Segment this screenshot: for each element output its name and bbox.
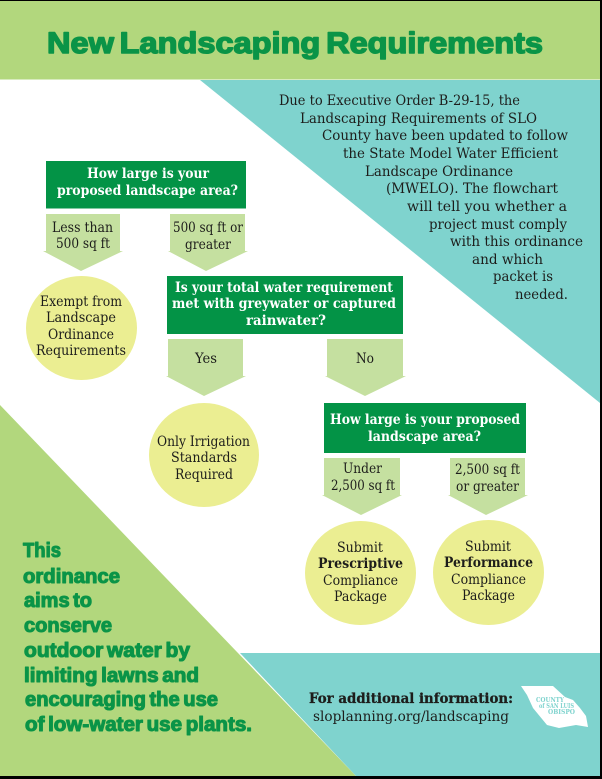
arrow: under 2,500 sq ft bbox=[322, 458, 402, 515]
circle: exempt: Exempt from bbox=[40, 294, 122, 310]
arrow: less than 500 sq ft: Less than bbox=[52, 220, 113, 236]
footer text bbox=[309, 691, 513, 725]
intro text: and which bbox=[472, 252, 543, 268]
intro text: County have been updated to follow bbox=[322, 128, 568, 144]
conservation text: encouraging the use bbox=[25, 689, 218, 711]
intro text: packet is bbox=[493, 269, 553, 285]
intro text: Landscape Ordinance bbox=[365, 164, 513, 180]
circle: performance package: Performance bbox=[444, 555, 533, 571]
question box: water requirement: Is your total water requirement bbox=[175, 280, 393, 296]
arrow: 500 sq ft or greater: 500 sq ft or bbox=[173, 220, 243, 236]
conservation text bbox=[23, 540, 252, 736]
conservation text: This bbox=[23, 540, 61, 562]
circle: irrigation standards: Standards bbox=[171, 450, 237, 466]
arrow: 500 sq ft or greater: greater bbox=[185, 237, 231, 253]
circle: exempt: Requirements bbox=[36, 343, 126, 359]
panel: intro teal triangle bbox=[200, 80, 600, 403]
question box: landscape area: proposed landscape area? bbox=[57, 183, 238, 199]
circle: exempt bbox=[26, 276, 137, 380]
circle: prescriptive package bbox=[305, 521, 416, 625]
arrow: 2,500 sq ft or greater bbox=[448, 458, 528, 515]
icon: county map logo bbox=[521, 686, 588, 728]
conservation text: outdoor water by bbox=[24, 640, 191, 662]
question box: water requirement: met with greywater or captured bbox=[172, 296, 396, 312]
circle: exempt: Ordinance bbox=[48, 327, 114, 343]
title: New Landscaping Requirements bbox=[47, 27, 543, 60]
question box: proposed landscape area: How large is your proposed bbox=[330, 412, 520, 428]
panel: conservation green triangle bbox=[0, 405, 356, 776]
arrow: under 2,500 sq ft: Under bbox=[343, 461, 382, 477]
circle: performance package: Compliance bbox=[451, 572, 526, 588]
arrow: less than 500 sq ft bbox=[43, 214, 123, 271]
footer text: For additional information: bbox=[309, 691, 513, 707]
circle: prescriptive package: Prescriptive bbox=[318, 556, 403, 572]
arrow: yes: Yes bbox=[194, 351, 217, 367]
circle: prescriptive package: Compliance bbox=[323, 573, 398, 589]
arrow: 2,500 sq ft or greater: or greater bbox=[456, 479, 519, 495]
question box: landscape area: How large is your bbox=[87, 166, 210, 182]
intro text: needed. bbox=[515, 287, 568, 303]
question box: landscape area bbox=[46, 161, 246, 208]
conservation text: aims to bbox=[24, 590, 92, 612]
intro text: the State Model Water Efficient bbox=[343, 146, 558, 162]
arrow: under 2,500 sq ft: 2,500 sq ft bbox=[331, 478, 395, 494]
circle: performance package: Package bbox=[462, 588, 515, 604]
icon: county map logo: OBISPO bbox=[548, 708, 575, 716]
intro text: will tell you whether a bbox=[407, 199, 567, 215]
intro text: Due to Executive Order B-29-15, the bbox=[279, 93, 520, 109]
icon: county map logo: of SAN LUIS bbox=[539, 702, 574, 710]
circle: prescriptive package: Package bbox=[334, 589, 387, 605]
conservation text: ordinance bbox=[23, 566, 120, 588]
circle: irrigation standards: Required bbox=[175, 467, 233, 483]
conservation text: of low-water use plants. bbox=[25, 714, 252, 736]
circle: performance package bbox=[433, 520, 544, 625]
arrow: 500 sq ft or greater bbox=[168, 214, 248, 271]
question box: water requirement: rainwater? bbox=[246, 313, 326, 329]
question box: water requirement bbox=[167, 276, 403, 334]
arrow: no: No bbox=[356, 351, 374, 367]
intro text: with this ordinance bbox=[450, 234, 583, 250]
footer text: sloplanning.org/landscaping bbox=[313, 709, 509, 725]
circle: performance package: Submit bbox=[465, 539, 511, 555]
conservation text: limiting lawns and bbox=[24, 665, 199, 687]
intro text: Landscaping Requirements of SLO bbox=[300, 111, 537, 127]
question box: proposed landscape area bbox=[324, 403, 526, 453]
conservation text: conserve bbox=[24, 615, 112, 637]
intro text: (MWELO). The flowchart bbox=[386, 181, 558, 197]
circle: exempt: Landscape bbox=[46, 310, 116, 326]
circle: prescriptive package: Submit bbox=[337, 540, 383, 556]
intro text bbox=[279, 93, 583, 303]
intro text: project must comply bbox=[429, 217, 567, 233]
panel: title band bbox=[0, 1, 600, 80]
panel: additional information footer bbox=[240, 653, 600, 776]
arrow: no bbox=[325, 339, 406, 396]
arrow: 2,500 sq ft or greater: 2,500 sq ft bbox=[455, 462, 520, 478]
icon: county map logo: COUNTY bbox=[536, 696, 564, 704]
arrow: less than 500 sq ft: 500 sq ft bbox=[56, 236, 110, 252]
arrow: yes bbox=[166, 339, 246, 396]
circle: irrigation standards: Only Irrigation bbox=[157, 434, 250, 450]
circle: irrigation standards bbox=[149, 403, 259, 507]
question box: proposed landscape area: landscape area? bbox=[368, 429, 481, 445]
